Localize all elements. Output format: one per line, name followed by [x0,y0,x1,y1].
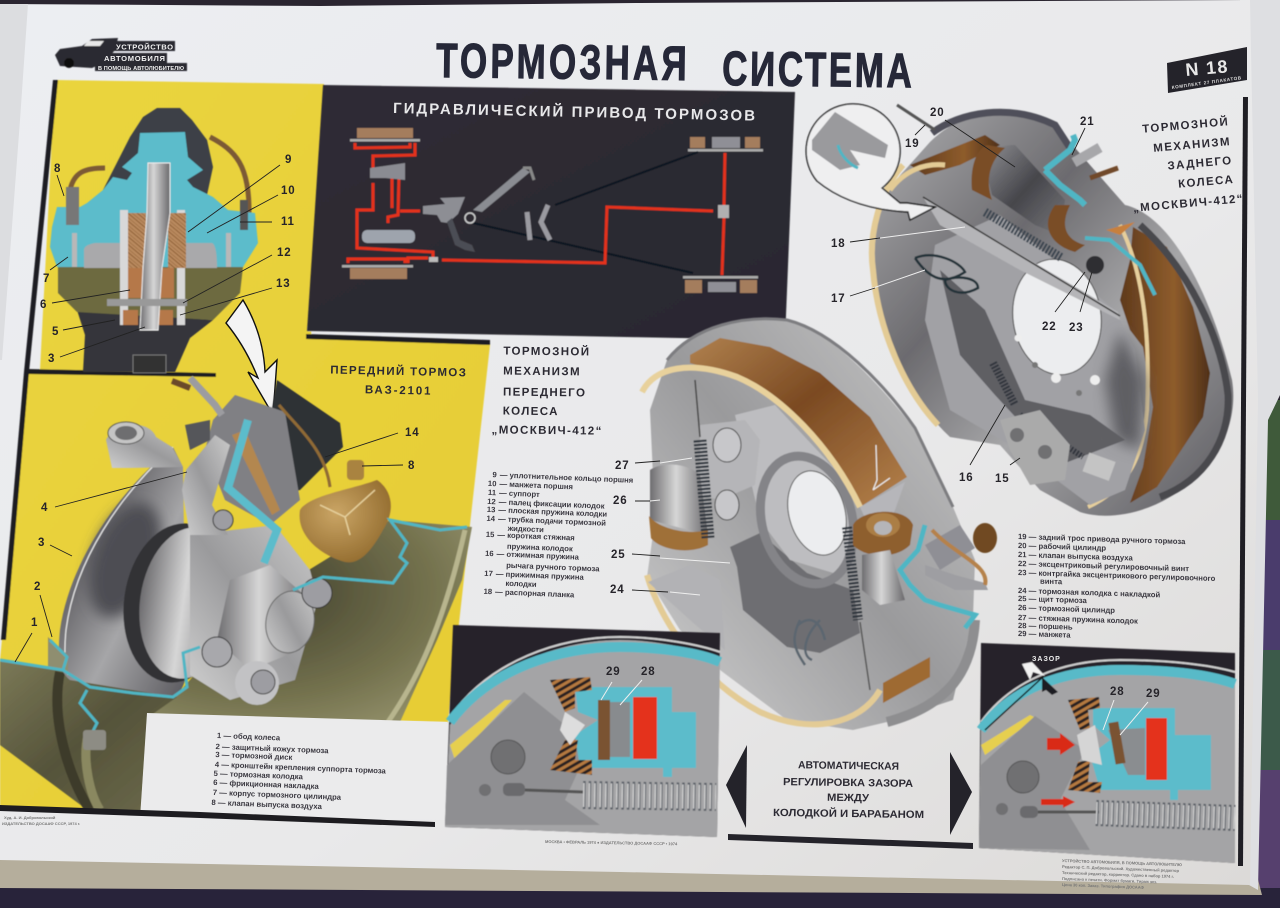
arrows and caption: automatic adjustment: МЕЖДУ [827,792,870,804]
heading: rear brake: ЗАДНЕГО [1167,155,1233,173]
imprint text: Технический редактор, корректор. Сдано в набор 1974 г. [1062,870,1174,879]
brown ring [853,512,913,556]
badge: N 18: КОМПЛЕКТ 27 ПЛАКАТОВ [1171,75,1242,90]
heading: front brake: ПЕРЕДНИЙ ТОРМОЗ [330,364,467,379]
legend 19-29: винта [1040,577,1063,586]
section numbers and leaders: 7 [43,273,50,285]
heading: front mechanism [492,344,604,438]
legend 9-18: 15 [486,530,495,539]
cyan wall [900,525,975,628]
drawing: front disc brake VAZ-2101 [0,378,472,812]
panel: legend 1-8: 4 — кронштейн крепления суппорта тормоза [215,760,387,776]
imprint text: Худ. А. И. Добровольский [4,815,56,820]
inset: adjuster under pressure [979,643,1235,863]
legend 9-18: — распорная планка [495,587,575,600]
panel: legend 1-8: 8 — клапан выпуска воздуха [211,798,323,811]
legend 19-29: 28 — поршень [1018,621,1073,632]
lower shoe [647,575,880,724]
pad tip [860,482,905,540]
legend 19-29: 22 — эксцентриковый регулировочный винт [1018,559,1189,573]
lower numbers and leaders: 1 [31,617,38,629]
heading: rear brake: ТОРМОЗНОЙ [1142,115,1230,136]
logo text: В ПОМОЩЬ АВТОЛЮБИТЕЛЮ [98,66,184,72]
panel: legend 1-8: 1 — обод колеса [217,731,281,742]
front numbers and leaders: 24 [610,584,624,596]
title: ТОРМОЗНАЯ [436,33,687,90]
legend 9-18: пружина колодок [507,542,573,553]
heading: rear brake: КОЛЕСА [1178,174,1235,191]
shoe retainer [915,255,978,293]
arrows and caption: automatic adjustment: КОЛОДКОЙ И БАРАБАНОМ [773,806,924,821]
panel: legend 1-8: 3 — тормозной диск [215,750,293,762]
title: СИСТЕМА [722,41,912,98]
cylinder 26 [650,465,708,535]
panel: legend 1-8: 2 — защитный кожух тормоза [215,742,329,755]
inset 2 labels: 29 [1146,688,1160,700]
inset numbers: 28 [641,666,655,678]
front numbers and leaders [610,458,730,596]
lower numbers and leaders: 8 [408,460,415,472]
legend 9-18: 11 [488,488,497,497]
panel: legend 1-8: 7 — корпус тормозного цилиндра [213,788,342,802]
wheel hole [1005,253,1109,381]
arrows and caption: automatic adjustment: АВТОМАТИЧЕСКАЯ [798,759,899,773]
cyan shield outline [0,520,467,737]
legend 9-18: — суппорт [499,488,540,499]
legend 19-29: 26 — тормозной цилиндр [1018,603,1115,615]
imprint text: УСТРОЙСТВО АВТОМОБИЛЯ, В ПОМОЩЬ АВТОЛЮБИТЕЛЮ [1062,858,1182,867]
logo text: УСТРОЙСТВО [116,42,173,52]
caliper body [260,380,343,500]
legend 9-18: 12 [487,497,496,506]
brake lines [348,143,725,275]
badge: N 18: N 18 [1185,56,1228,80]
imprint text: Редактор С. П. Добровольский. Художественный редактор [1062,864,1180,873]
brown shoe [1120,227,1210,503]
hub [113,516,243,690]
adjuster [1086,256,1104,274]
legend 9-18: — прижимная пружина [496,569,585,582]
legend 9-18: колодки [505,579,537,589]
legend 9-18: 18 [483,587,493,596]
lower spring [993,363,1015,405]
legend 19-29: 29 — манжета [1018,629,1071,640]
disc [59,447,188,697]
lower numbers and leaders [15,427,419,662]
drum back plate [647,319,975,730]
inset 2 labels: ЗАЗОР [1032,656,1061,663]
legend 9-18: — трубка подачи тормозной [498,514,606,528]
heading: front mechanism: ТОРМОЗНОЙ [503,345,591,358]
spring [985,212,1062,258]
right frame rule [1238,97,1248,866]
section numbers and leaders: 10 [281,185,295,197]
panel: legend 1-8 [0,713,447,827]
legend 9-18: 10 [488,479,497,488]
legend 19-29: 23 — контргайка эксцентрикового регулировочного [1018,568,1216,583]
section numbers and leaders: 9 [285,154,292,166]
legend 9-18: — палец фиксации колодок [499,497,605,511]
rear numbers and leaders: 23 [1069,322,1083,334]
inset 2 labels [1032,656,1160,735]
callout: cable end detail [806,104,935,220]
rear numbers and leaders: 18 [831,238,845,250]
legend 19-29: 27 — стяжная пружина колодок [1018,613,1138,626]
legend 19-29: 19 — задний трос привода ручного тормоза [1018,532,1186,546]
inset: adjuster at rest [445,625,720,837]
panel: hydraulic drive [307,85,795,340]
legend 9-18: 17 [484,569,493,578]
legend 9-18: жидкости [506,524,544,534]
section numbers and leaders: 8 [54,163,61,175]
panel: rear wheel brake [872,105,1233,516]
rear numbers and leaders: 15 [995,473,1009,485]
lower plate cut [648,565,725,650]
legend 9-18: — отжимная пружина [496,549,580,562]
springs [700,440,708,538]
components [370,163,405,180]
inset numbers: 29 [606,666,620,678]
panel: legend 1-8: 5 — тормозная колодка [213,769,304,781]
legend 9-18: рычага ручного тормоза [506,561,600,573]
rear numbers and leaders: 17 [831,293,845,305]
section numbers and leaders: 13 [276,278,290,290]
legend 9-18: 13 [487,505,496,514]
retainer [795,620,825,665]
imprint text: Подписано к печати. Формат бумаги. Тираж экз. [1062,876,1157,884]
imprint text: ИЗДАТЕЛЬСТВО ДОСААФ СССР, 1974 г. [2,821,80,826]
heading: rear brake [1126,114,1244,215]
spreader bar [923,197,1120,320]
cable 19 [897,105,935,130]
heading: front mechanism: КОЛЕСА [503,406,559,418]
inset numbers [601,666,655,705]
wheel hole [779,464,855,562]
brown shoe [690,338,907,507]
bolts [700,420,760,500]
rear numbers and leaders [831,107,1094,485]
legend 9-18: 14 [486,514,496,523]
imprint text: Цена 30 коп. Заказ. Типография ДОСААФ [1062,882,1145,890]
heading: front brake [330,364,467,398]
legend 9-18: — короткая стяжная [497,530,575,542]
panel: legend 1-8: 6 — фрикционная накладка [213,778,320,791]
badge: N 18 [1167,47,1247,93]
legend 9-18: 16 [485,549,494,558]
legend 19-29 [1018,532,1216,644]
title [436,33,912,98]
section numbers and leaders: 12 [277,247,291,259]
section numbers and leaders [40,154,295,365]
arrows and caption: automatic adjustment: РЕГУЛИРОВКА ЗАЗОРА [783,776,914,790]
legend 9-18 [483,470,633,602]
section numbers and leaders: 3 [48,353,55,365]
anchor plate [1000,410,1070,485]
cyan bore [1045,135,1085,205]
bolts [302,578,332,608]
imprint text [2,815,1182,890]
legend 19-29: 24 — тормозная колодка с накладкой [1018,586,1160,599]
legend 19-29: 21 — клапан выпуска воздуха [1018,550,1133,563]
rear numbers and leaders: 21 [1080,116,1094,128]
inner shading [730,533,860,653]
legend 9-18: 9 [492,470,497,479]
brass cylinder [300,480,391,562]
knuckle eye [106,425,183,468]
heading: front mechanism: „МОСКВИЧ-412“ [492,424,603,438]
heading: rear brake: МЕХАНИЗМ [1153,136,1231,155]
front numbers and leaders: 26 [613,495,627,507]
heading: front mechanism: ПЕРЕДНЕГО [503,387,586,399]
front numbers and leaders: 27 [615,460,629,472]
section numbers and leaders: 5 [52,326,59,338]
logo text [98,42,184,72]
section numbers and leaders: 11 [281,216,295,228]
legend 9-18: — плоская пружина колодки [498,505,608,519]
front numbers and leaders: 25 [611,549,625,561]
lower numbers and leaders: 2 [34,581,41,593]
section drawing: caliper cross section [50,108,258,373]
rear numbers and leaders: 16 [959,472,973,484]
shield and rim [140,520,472,722]
lower numbers and leaders: 14 [405,427,419,439]
panel: front caliper yellow background [0,80,795,812]
rear numbers and leaders: 20 [930,107,944,119]
fittings [925,525,975,570]
section numbers and leaders: 6 [40,299,47,311]
legend 19-29: 20 — рабочий цилиндр [1018,541,1106,553]
imprint text: МОСКВА • ФЕВРАЛЬ 1974 ● ИЗДАТЕЛЬСТВО ДОСААФ СССР • 1974 [545,839,678,846]
lower numbers and leaders: 4 [41,502,48,514]
legend 9-18: — уплотнительное кольцо поршня [500,470,633,485]
wheels [342,128,763,293]
white arrow to lower drawing [226,300,277,415]
hub nose [217,565,310,670]
brown upper shoe [910,135,1000,175]
cables [473,152,698,273]
heading: front mechanism: МЕХАНИЗМ [503,366,581,378]
heading: hydraulic drive: ГИДРАВЛИЧЕСКИЙ ПРИВОД ТОРМОЗОВ [393,99,755,125]
inset 2 labels: 28 [1110,686,1124,698]
legend 19-29: 25 — щит тормоза [1018,594,1087,605]
wheel cylinder [985,145,1065,235]
rear numbers and leaders: 19 [905,138,919,150]
panel: front wheel brake mechanism [642,319,997,730]
heading: front brake: ВАЗ-2101 [365,384,432,398]
logo: car and series badge [55,38,187,71]
lower numbers and leaders: 3 [38,537,45,549]
heading: rear brake: „МОСКВИЧ-412“ [1133,193,1244,215]
rear numbers and leaders: 22 [1042,321,1056,333]
inner plate [925,215,1145,505]
legend 9-18: — манжета поршня [499,479,573,491]
shell [872,111,1233,516]
arrows and caption: automatic adjustment [726,745,973,849]
logo text: АВТОМОБИЛЯ [104,54,165,63]
